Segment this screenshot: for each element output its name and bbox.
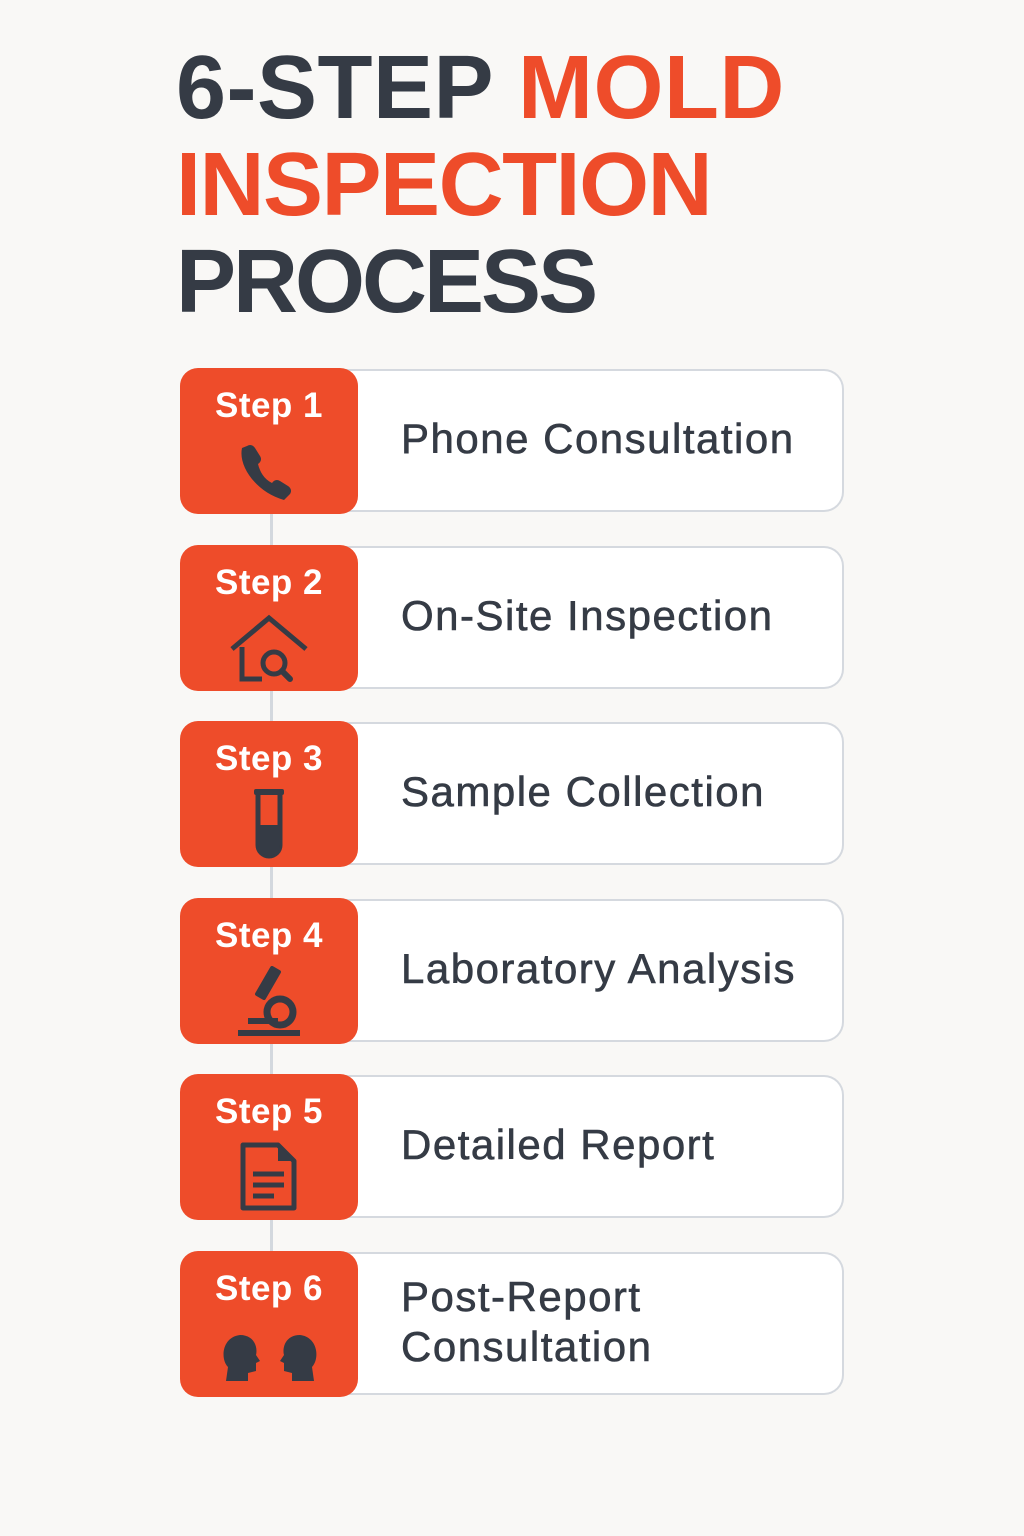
icon: microscope xyxy=(238,966,300,1036)
step 5 xyxy=(180,1074,844,1220)
step 4 xyxy=(180,898,844,1044)
step 1: Step 1 xyxy=(215,386,323,425)
title xyxy=(176,38,785,332)
step 5: Step 5 xyxy=(215,1092,323,1131)
step 4: Step 4 xyxy=(215,916,323,955)
title: 6-STEP MOLD xyxy=(176,38,785,138)
title: INSPECTION xyxy=(176,135,711,235)
step 6: Step 6 xyxy=(215,1269,323,1308)
step 2 xyxy=(180,545,844,691)
icon: document xyxy=(240,1142,296,1210)
step 6 xyxy=(180,1251,844,1397)
label: On-Site Inspection xyxy=(401,592,774,639)
step 1 xyxy=(180,368,844,514)
label: Laboratory Analysis xyxy=(401,945,796,992)
step 2: Step 2 xyxy=(215,563,323,602)
title: PROCESS xyxy=(176,232,595,332)
label: Phone Consultation xyxy=(401,415,795,462)
label: Consultation xyxy=(401,1323,652,1370)
step 3: Step 3 xyxy=(215,739,323,778)
icon: test tube xyxy=(254,789,284,858)
label: Post-Report xyxy=(401,1273,642,1320)
step 3 xyxy=(180,721,844,867)
icon: house search xyxy=(230,614,308,682)
label: Detailed Report xyxy=(401,1121,715,1168)
label: Sample Collection xyxy=(401,768,765,815)
icon: two heads xyxy=(224,1335,316,1381)
icon: phone xyxy=(241,445,291,500)
label xyxy=(401,1273,652,1370)
